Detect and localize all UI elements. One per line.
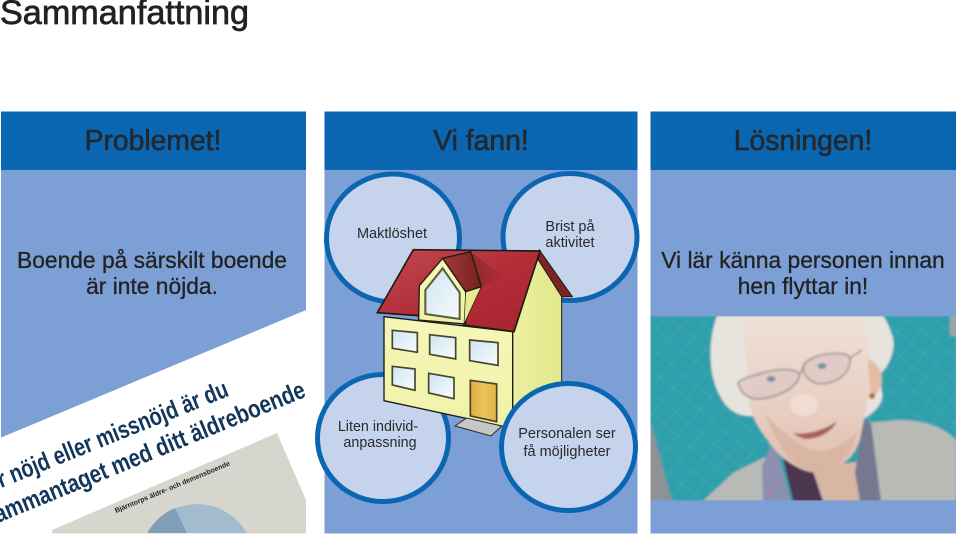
cardigan bbox=[702, 456, 766, 500]
glasses bridge and temple bbox=[800, 350, 862, 374]
panel: Problemet bbox=[0, 112, 309, 534]
text: survey result: Boende på särskilt boende bbox=[17, 247, 287, 273]
front wall bbox=[384, 317, 513, 427]
hair bbox=[711, 316, 894, 418]
neck bbox=[812, 462, 860, 501]
header: Problemet bbox=[1, 112, 306, 170]
header: Vi fann bbox=[324, 112, 638, 170]
dormer wall bbox=[419, 258, 466, 324]
header: Lösningen bbox=[650, 112, 956, 170]
text: solution: hen flyttar in! bbox=[738, 273, 868, 299]
survey heading bbox=[0, 384, 305, 522]
circle: Personalen ser få möjligheter: få möjligheter bbox=[523, 444, 611, 460]
door step bbox=[455, 418, 502, 436]
survey document image bbox=[0, 310, 309, 534]
survey chart card bbox=[52, 433, 306, 534]
header: Lösningen: Lösningen! bbox=[734, 124, 872, 156]
nose bbox=[790, 394, 818, 416]
panel: Lösningen bbox=[650, 112, 956, 534]
dormer side bbox=[464, 287, 481, 324]
circle: Brist på aktivitet bbox=[503, 174, 637, 300]
face bbox=[746, 332, 870, 474]
text: solution: Vi lär känna personen innan bbox=[661, 247, 945, 273]
text: survey result: är inte nöjda. bbox=[86, 273, 218, 299]
roof bbox=[377, 250, 540, 332]
roof shadow bbox=[470, 252, 503, 287]
side wall bbox=[513, 253, 562, 428]
dormer window bbox=[425, 268, 460, 319]
circle: Liten individanpassning bbox=[318, 374, 448, 502]
photo: smiling elderly woman bbox=[650, 316, 956, 501]
header: Problemet: Problemet! bbox=[85, 124, 221, 156]
survey heading: ammantaget med ditt äldreboende bbox=[0, 376, 309, 529]
eyes bbox=[766, 376, 776, 382]
circle: Personalen ser få möjligheter bbox=[502, 384, 636, 510]
glasses bbox=[738, 353, 850, 399]
survey chart card: Bjärntorps äldre- och demensboende bbox=[114, 460, 231, 515]
scarf grey bbox=[855, 419, 881, 501]
ear bbox=[868, 359, 882, 399]
circle: Brist på aktivitet: Brist på bbox=[545, 219, 596, 235]
text: Liten individanpassning: anpassning bbox=[343, 435, 417, 451]
circle: Maktlöshet bbox=[326, 174, 460, 302]
dormer roof bbox=[443, 252, 481, 292]
panel: Vi fann bbox=[318, 112, 638, 534]
survey heading: r nöjd eller missnöjd är du bbox=[0, 375, 232, 494]
header: Vi fann: Vi fann! bbox=[433, 124, 529, 156]
circle: Brist på aktivitet: aktivitet bbox=[545, 235, 595, 251]
earring bbox=[869, 393, 875, 399]
circle: Personalen ser få möjligheter: Personalen ser bbox=[518, 426, 616, 442]
mouth bbox=[793, 421, 837, 439]
windows bbox=[392, 330, 498, 399]
door bbox=[470, 380, 497, 422]
scarf floral bbox=[762, 444, 791, 501]
circle: Maktlöshet: Maktlöshet bbox=[357, 226, 427, 242]
icon: house bbox=[377, 250, 572, 436]
scarf dark bbox=[783, 459, 830, 501]
text: Liten individanpassning: Liten individ- bbox=[338, 419, 418, 435]
roof eave bbox=[538, 250, 572, 297]
jaw shading bbox=[765, 412, 858, 473]
